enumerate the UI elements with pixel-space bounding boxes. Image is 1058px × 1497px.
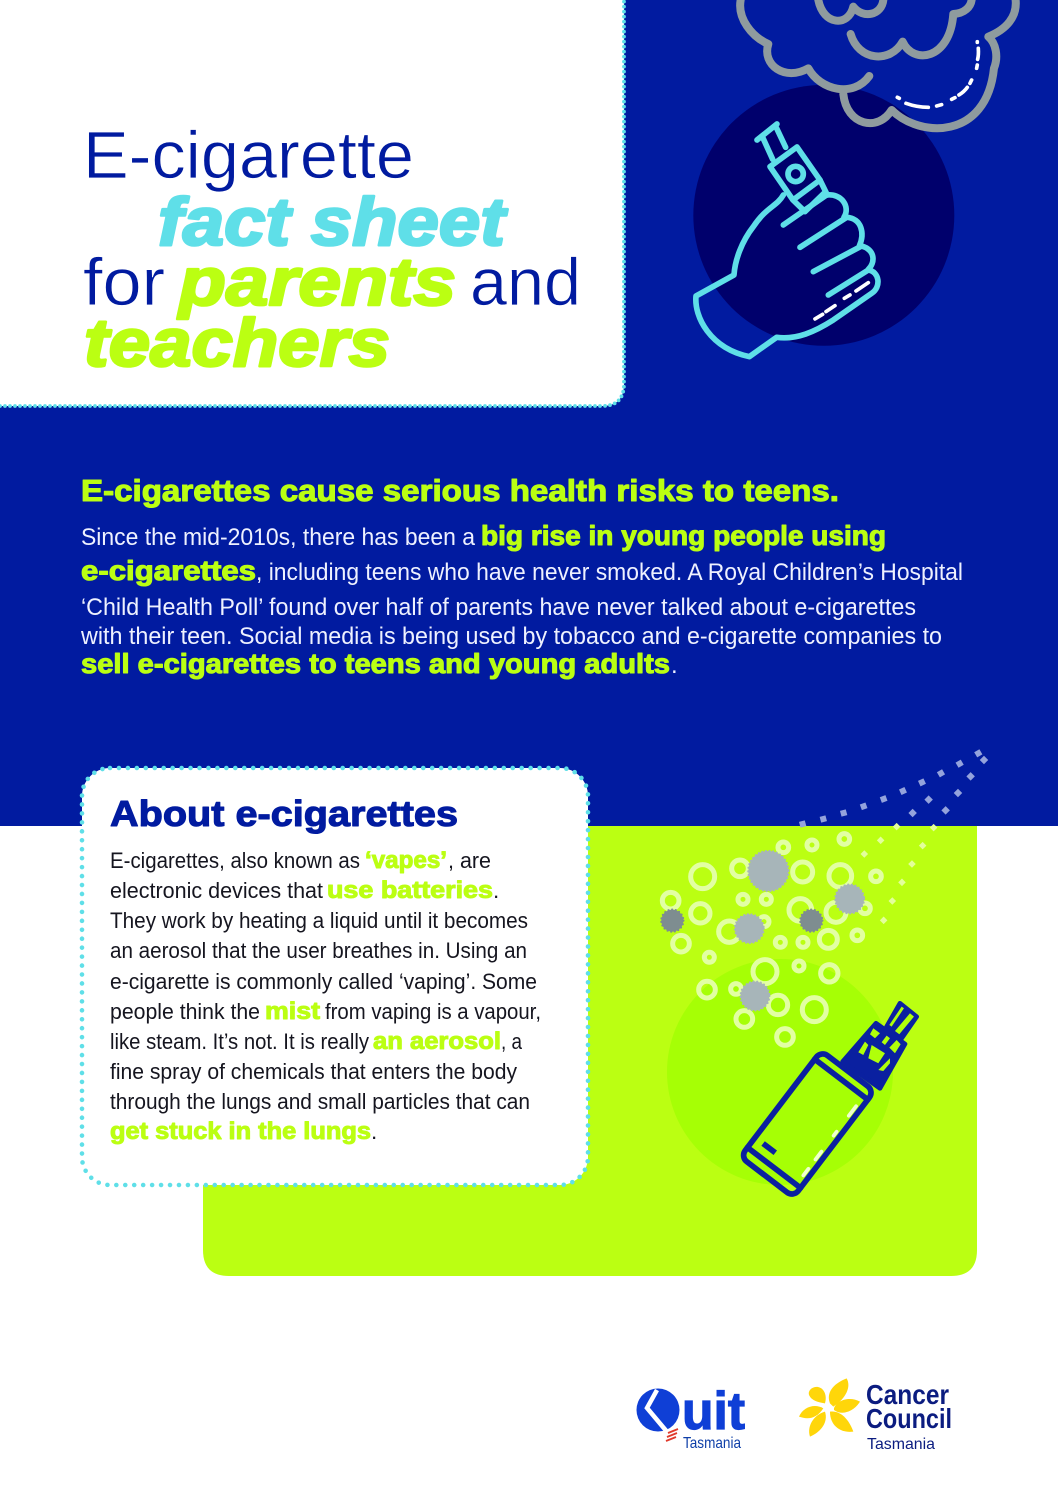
text block: about body: e-cigarette is commonly called ‘vaping’. Some [110,969,537,994]
text block: introduction: ‘Child Health Poll’ found over half of parents have never talked about e-cigarettes [81,594,916,621]
text block: about body [110,847,541,1145]
icon: hand holding e-cigarette with vapour cloud [693,0,1016,357]
logo: Cancer Council Tasmania [799,1378,952,1453]
text block: introduction: e-cigarettes [81,555,256,586]
heading: about e-cigarettes: About e-cigarettes [110,793,458,834]
text block: introduction: big rise in young people using [481,520,886,551]
icon: hand and device [696,124,878,357]
text block: about body: They work by heating a liquid until it becomes [110,908,528,933]
text block: about body: ‘vapes’ [365,847,447,874]
text block: about body: an aerosol that the user breathes in. Using an [110,938,527,963]
title: parents [177,244,456,320]
title: and [470,245,581,320]
heading: health risks: E-cigarettes cause serious health risks to teens. [81,473,839,508]
chart: vapour and device illustration [661,749,988,1197]
title: teachers [84,305,390,381]
text block: about body: people think the [110,999,260,1024]
icon: spray dots [799,749,988,924]
logo: Cancer Council Tasmania: Tasmania [867,1436,935,1453]
logo: Cancer Council Tasmania: Council [866,1403,952,1434]
icon: grey particles [661,851,864,1010]
icon: vapour cloud [740,0,1016,128]
title: fact sheet [158,184,508,260]
text block: introduction: with their teen. Social media is being used by tobacco and e-cigarette companies to [80,623,942,650]
text block: introduction: sell e-cigarettes to teens and young adults [81,648,670,679]
text block: about body: . [371,1119,377,1144]
title: E-cigarette [83,118,414,193]
title [83,118,581,381]
panel: lime background [203,826,977,1276]
logo: Quit Tasmania: uit [682,1382,745,1441]
panel: title card [0,0,624,406]
text block: about body: , are [448,848,491,873]
panel: blue background [0,0,1058,826]
text block: introduction [80,520,963,679]
text block: about body: get stuck in the lungs [110,1118,371,1145]
text block: about body: electronic devices that [110,878,324,903]
logo: Quit Tasmania: Tasmania [683,1435,741,1452]
text block: about body: through the lungs and small particles that can [110,1089,530,1114]
icon: daffodil [799,1378,860,1437]
panel: about e-cigarettes card [82,768,588,1185]
text block: about body: mist [265,998,320,1025]
title: for [83,245,165,320]
text block: introduction: Since the mid-2010s, there has been a [81,524,476,551]
text block: about body: E-cigarettes, also known as [110,848,360,873]
logo: Quit Tasmania [636,1382,745,1452]
text block: about body: from vaping is a vapour, [325,999,541,1024]
logo: Cancer Council Tasmania: Cancer [866,1379,949,1410]
text block: about body: . [493,878,499,903]
icon: vape device [740,1003,917,1197]
text block: introduction: . [671,652,678,679]
text block: about body: an aerosol [373,1028,501,1055]
text block: about body: like steam. It’s not. It is really [110,1029,370,1054]
text block: about body: , a [501,1029,522,1054]
text block: about body: use batteries [327,877,493,904]
icon: aerosol rings [662,834,881,1045]
text block: introduction: , including teens who have never smoked. A Royal Children’s Hospital [256,559,963,586]
text block: about body: fine spray of chemicals that enters the body [110,1059,518,1084]
